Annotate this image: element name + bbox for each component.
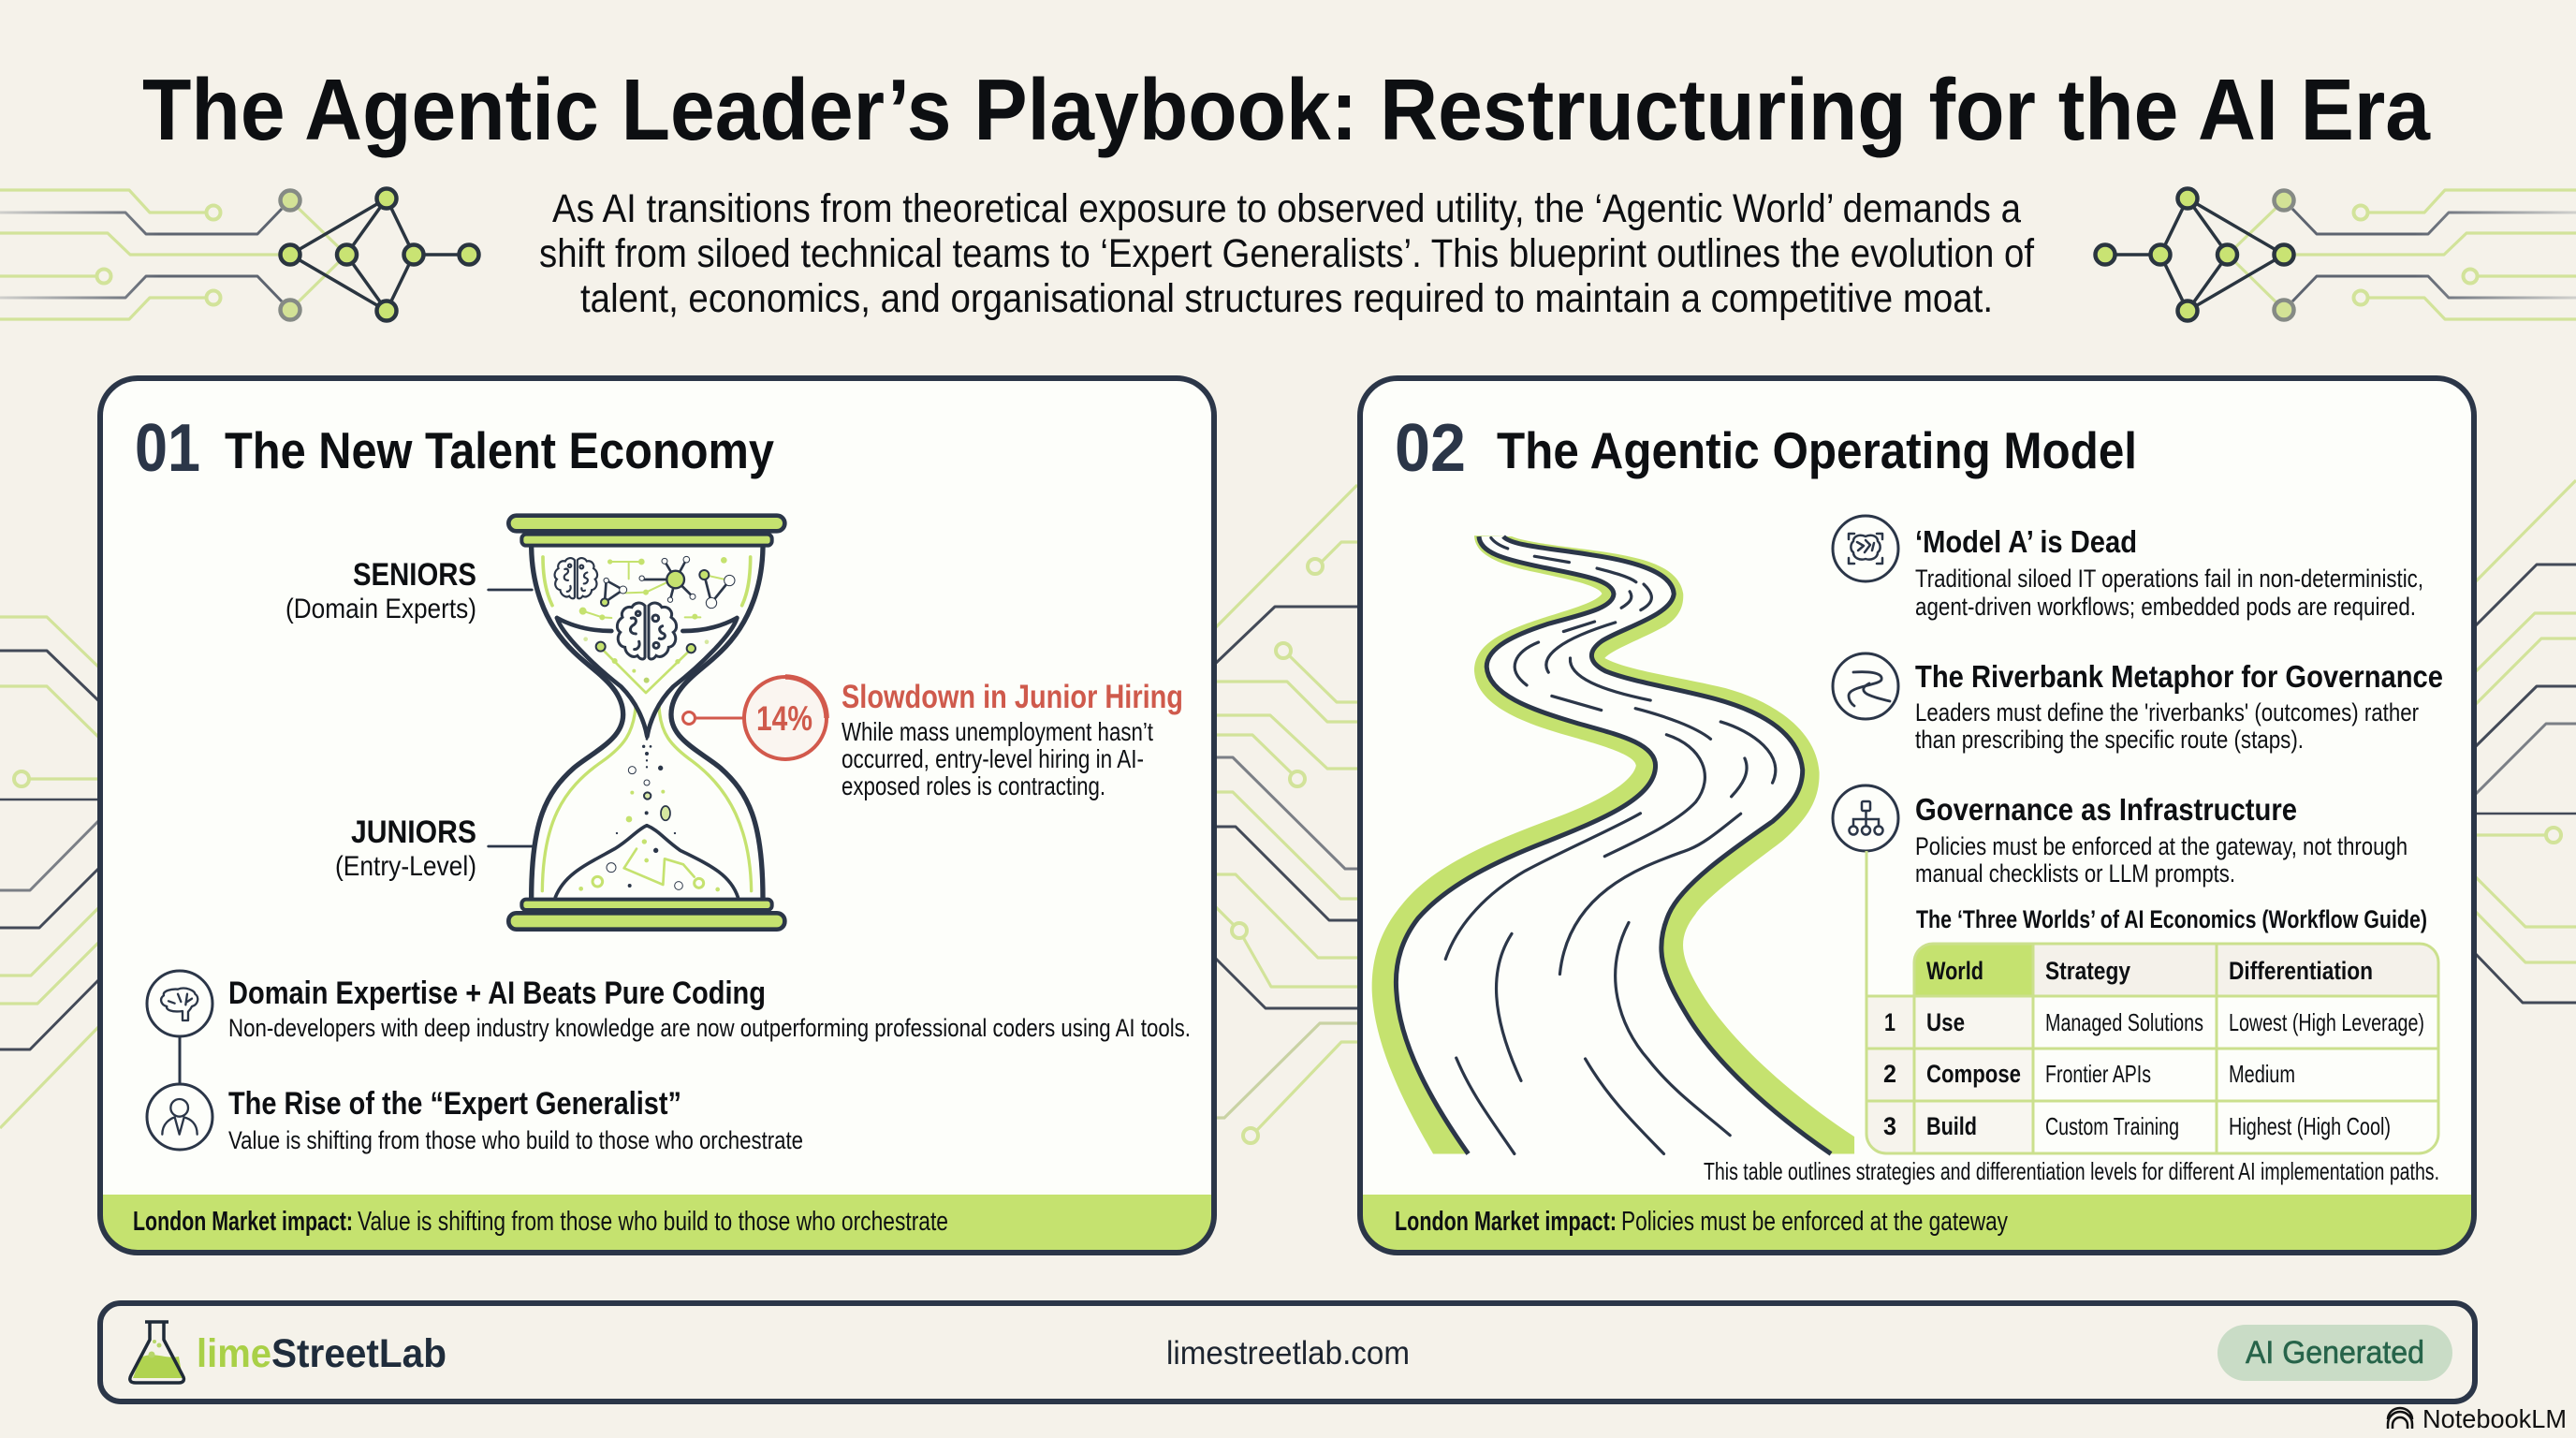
- text: domain expertise: [228, 976, 1191, 1042]
- stat badge: 14%: 14%: [756, 699, 812, 738]
- hourglass illustration: [489, 516, 784, 930]
- intro text: [539, 186, 2035, 321]
- footer band: london market impact: [100, 1195, 1214, 1253]
- table row 2: [1883, 1060, 2295, 1088]
- river flow lines: [1445, 537, 1776, 1153]
- footer bar: [100, 1303, 2475, 1401]
- intro text: As AI transitions from theoretical exposure to observed utility, the ‘Agentic World’ demands a: [552, 186, 2021, 231]
- table row 1: [1884, 1008, 2424, 1036]
- logo wordmark: limeStreetLab: [197, 1331, 446, 1376]
- text: model a is dead: [1915, 524, 2423, 621]
- text: expert generalist: Value is shifting from those who build to those who orchestrate: [228, 1126, 803, 1154]
- text: governance as infrastructure: Policies must be enforced at the gateway, not through: [1915, 832, 2408, 860]
- text: model a is dead: ‘Model A’ is Dead: [1915, 524, 2137, 559]
- brain: upper centre: [617, 603, 677, 659]
- table row 3: 3: [1883, 1112, 1896, 1140]
- falling particles: [578, 738, 720, 891]
- intro text: talent, economics, and organisational structures required to maintain a competitive moat.: [580, 276, 1993, 321]
- footer band: london market impact: London Market impact:: [1395, 1207, 1617, 1237]
- text: domain expertise: Domain Expertise + AI Beats Pure Coding: [228, 976, 766, 1011]
- circuit network: top left: [0, 189, 479, 320]
- text: model a is dead: Traditional siloed IT operations fail in non-deterministic,: [1915, 565, 2423, 593]
- text: expert generalist: The Rise of the “Expert Generalist”: [228, 1086, 681, 1122]
- text: riverbank metaphor: Leaders must define the 'riverbanks' (outcomes) rather: [1915, 698, 2419, 726]
- circuit traces: left edge: [0, 617, 103, 1128]
- table header row: Strategy: [2045, 957, 2130, 985]
- table header row: Differentiation: [2229, 957, 2373, 985]
- callout: slowdown in junior hiring: While mass unemployment hasn’t: [842, 717, 1153, 746]
- text: riverbank metaphor: than prescribing the specific route (staps).: [1915, 726, 2304, 754]
- title: The Agentic Leader’s Playbook: Restructuring for the AI Era: [142, 61, 2431, 158]
- stat badge: 14%: [683, 677, 827, 759]
- text: riverbank metaphor: The Riverbank Metaphor for Governance: [1915, 659, 2443, 694]
- circuit network: top right: [2095, 189, 2576, 320]
- label: seniors: [285, 557, 476, 624]
- table heading: The ‘Three Worlds’ of AI Economics (Workflow Guide): [1916, 905, 2427, 933]
- text: expert generalist: [228, 1086, 803, 1154]
- intro text: shift from siloed technical teams to ‘Expert Generalists’. This blueprint outlines the evolution of: [539, 231, 2035, 276]
- footer band: london market impact: Value is shifting from those who build to those who orchestrate: [358, 1207, 948, 1237]
- brain: upper small: [555, 558, 597, 598]
- label: seniors: (Domain Experts): [285, 594, 476, 624]
- circuit traces: centre gutter: [1212, 485, 1357, 1143]
- icon: winding river: [1833, 653, 1898, 719]
- label: seniors: SENIORS: [353, 557, 476, 593]
- circuit traces: right edge: [2471, 480, 2576, 1003]
- website: limestreetlab.com: [1166, 1335, 1410, 1372]
- table row 2: Medium: [2229, 1060, 2295, 1088]
- text: domain expertise: Non-developers with deep industry knowledge are now outperforming professional coders using AI tools.: [228, 1014, 1191, 1042]
- callout: slowdown in junior hiring: occurred, entry-level hiring in AI-: [842, 744, 1144, 773]
- callout: slowdown in junior hiring: Slowdown in Junior Hiring: [842, 679, 1183, 715]
- label: juniors: (Entry-Level): [335, 851, 476, 882]
- icon: flask logo: [130, 1322, 183, 1383]
- icon: brain: [147, 971, 212, 1036]
- icon: person: [147, 1084, 212, 1150]
- table row 3: Highest (High Cool): [2229, 1112, 2391, 1140]
- panel: 01 the new talent economy: [100, 378, 1214, 1253]
- callout: slowdown in junior hiring: exposed roles is contracting.: [842, 771, 1105, 800]
- table row 2: 2: [1883, 1060, 1896, 1088]
- table header row: World: [1926, 957, 1983, 985]
- icon: brain in frame: [1833, 516, 1898, 581]
- notebooklm mark: NotebookLM: [2422, 1404, 2567, 1433]
- panel number 01: 01: [135, 411, 200, 486]
- badge: ai generated: [2217, 1325, 2452, 1381]
- text: governance as infrastructure: [1915, 792, 2408, 888]
- table row 1: Lowest (High Leverage): [2229, 1008, 2424, 1036]
- label: juniors: [335, 814, 476, 882]
- network icons in upper bulb: [579, 556, 735, 683]
- table row 2: Compose: [1926, 1060, 2021, 1088]
- table header row: [1926, 957, 2373, 985]
- table row 3: [1883, 1112, 2391, 1140]
- text: model a is dead: agent-driven workflows; embedded pods are required.: [1915, 593, 2416, 621]
- panel heading: The New Talent Economy: [225, 421, 774, 479]
- footer band: london market impact: Policies must be enforced at the gateway: [1621, 1207, 2008, 1237]
- connector between talent icons: [178, 1036, 182, 1084]
- label: juniors: JUNIORS: [351, 814, 476, 850]
- table row 1: Managed Solutions: [2045, 1008, 2203, 1036]
- footer band: london market impact: London Market impact:: [133, 1207, 353, 1237]
- text: governance as infrastructure: Governance as Infrastructure: [1915, 792, 2297, 827]
- badge: ai generated: AI Generated: [2246, 1335, 2424, 1371]
- footer band: london market impact: [1360, 1195, 2474, 1253]
- panel number 02: 02: [1395, 411, 1466, 486]
- table: three worlds of ai economics: [1866, 851, 2438, 1153]
- table row 2: Frontier APIs: [2045, 1060, 2151, 1088]
- river illustration: [1372, 536, 1854, 1153]
- table row 3: Build: [1926, 1112, 1977, 1140]
- table row 1: 1: [1884, 1008, 1895, 1036]
- text: riverbank metaphor: [1915, 659, 2443, 754]
- panel: 02 the agentic operating model: [1360, 378, 2474, 1253]
- text: governance as infrastructure: manual checklists or LLM prompts.: [1915, 859, 2235, 888]
- panel heading: The Agentic Operating Model: [1497, 421, 2137, 479]
- table row 3: Custom Training: [2045, 1112, 2179, 1140]
- table row 1: Use: [1926, 1008, 1965, 1036]
- icon: org chart: [1833, 785, 1898, 851]
- callout: slowdown in junior hiring: [842, 679, 1183, 800]
